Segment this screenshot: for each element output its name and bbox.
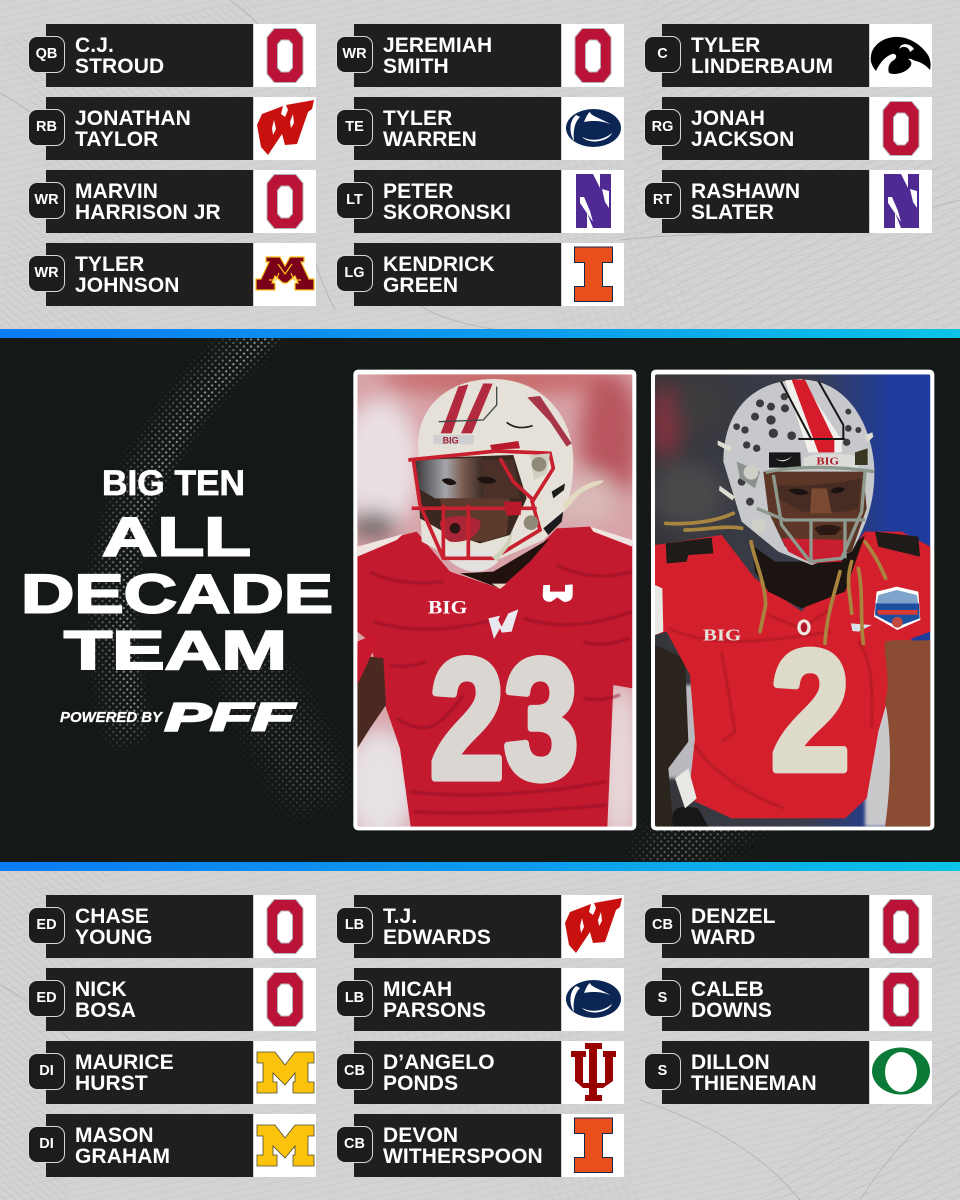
photo: Ohio State defensive end number 2: BIG (703, 625, 741, 644)
roster row: CB Devon Witherspoon, Illinois: CB (344, 1136, 365, 1152)
roster row: LG Kendrick Green, Illinois: LG (344, 265, 365, 281)
roster row: QB C.J. Stroud, Ohio State: QB (36, 46, 57, 62)
roster row: DI Mason Graham, Michigan: GRAHAM (75, 1145, 170, 1168)
roster row: RG Jonah Jackson, Ohio State: RG (652, 119, 673, 135)
photo: Wisconsin running back number 23: BIG (443, 435, 459, 445)
photo: Ohio State defensive end number 2 (648, 370, 934, 830)
roster row: LT Peter Skoronski, Northwestern: PETER (383, 180, 454, 203)
roster row: S Dillon Thieneman, Oregon: DILLON (691, 1051, 770, 1074)
roster row: LB Micah Parsons, Penn State: MICAH (383, 978, 452, 1001)
roster row: DI Maurice Hurst, Michigan: MAURICE (75, 1051, 174, 1074)
roster row: WR Tyler Johnson, Minnesota: WR (34, 265, 59, 281)
roster row: LG Kendrick Green, Illinois (336, 243, 624, 306)
roster row: CB Denzel Ward, Ohio State: WARD (691, 926, 756, 949)
roster row: ED Chase Young, Ohio State: CHASE (75, 905, 149, 928)
roster row: S Caleb Downs, Ohio State (644, 968, 932, 1031)
heading: Team: TEAM (64, 619, 287, 681)
roster row: QB C.J. Stroud, Ohio State: C.J. (75, 34, 114, 57)
photo: Wisconsin running back number 23 (340, 362, 640, 845)
roster row: RB Jonathan Taylor, Wisconsin: RB (36, 119, 57, 135)
roster row: ED Chase Young, Ohio State: ED (36, 917, 57, 933)
roster row: ED Nick Bosa, Ohio State: NICK (75, 978, 127, 1001)
roster row: CB Denzel Ward, Ohio State: CB (652, 917, 673, 933)
roster row: RT Rashawn Slater, Northwestern: RT (653, 192, 672, 208)
roster row: DI Mason Graham, Michigan (28, 1114, 316, 1177)
roster row: WR Marvin Harrison Jr, Ohio State: HARRISON JR (75, 201, 221, 224)
roster row: RB Jonathan Taylor, Wisconsin (28, 97, 316, 160)
roster row: RT Rashawn Slater, Northwestern (644, 170, 932, 233)
roster row: C Tyler Linderbaum, Iowa: LINDERBAUM (691, 55, 833, 78)
roster row: RB Jonathan Taylor, Wisconsin: TAYLOR (75, 128, 158, 151)
roster row: CB Devon Witherspoon, Illinois (336, 1114, 624, 1177)
heading: Big Ten: BIG TEN (102, 464, 245, 503)
roster row: WR Marvin Harrison Jr, Ohio State: MARVIN (75, 180, 158, 203)
roster row: LB T.J. Edwards, Wisconsin: EDWARDS (383, 926, 491, 949)
roster row: C Tyler Linderbaum, Iowa (644, 24, 932, 87)
roster row: LB Micah Parsons, Penn State: PARSONS (383, 999, 486, 1022)
roster row: RG Jonah Jackson, Ohio State (644, 97, 932, 160)
powered by label: POWERED BY (60, 709, 164, 726)
roster row: WR Jeremiah Smith, Ohio State (336, 24, 624, 87)
roster row: WR Marvin Harrison Jr, Ohio State (28, 170, 316, 233)
roster row: LB Micah Parsons, Penn State: LB (345, 990, 364, 1006)
roster row: QB C.J. Stroud, Ohio State: STROUD (75, 55, 164, 78)
roster row: ED Nick Bosa, Ohio State (28, 968, 316, 1031)
roster row: ED Chase Young, Ohio State (28, 895, 316, 958)
photo: Wisconsin running back number 23: BIG (428, 598, 467, 619)
bowl game patch (874, 587, 920, 630)
roster row: TE Tyler Warren, Penn State (336, 97, 624, 160)
PFF logo: PFF (165, 696, 296, 740)
center band: title and player photos (0, 329, 960, 871)
roster row: LB Micah Parsons, Penn State (336, 968, 624, 1031)
roster row: CB D'Angelo Ponds, Indiana (336, 1041, 624, 1104)
roster row: RT Rashawn Slater, Northwestern: RASHAWN (691, 180, 800, 203)
jersey number 2: 2 (771, 616, 850, 806)
roster row: WR Jeremiah Smith, Ohio State: WR (342, 46, 367, 62)
roster row: CB D'Angelo Ponds, Indiana: PONDS (383, 1072, 458, 1095)
roster row: S Caleb Downs, Ohio State: DOWNS (691, 999, 772, 1022)
roster row: QB C.J. Stroud, Ohio State (28, 24, 316, 87)
roster row: S Caleb Downs, Ohio State: S (658, 990, 667, 1006)
roster row: DI Mason Graham, Michigan: DI (39, 1136, 54, 1152)
roster row: WR Tyler Johnson, Minnesota: JOHNSON (75, 274, 180, 297)
roster row: ED Nick Bosa, Ohio State: BOSA (75, 999, 136, 1022)
roster row: TE Tyler Warren, Penn State: TE (345, 119, 364, 135)
roster row: RG Jonah Jackson, Ohio State: JONAH (691, 107, 765, 130)
bottom roster panel: defense (28, 895, 932, 1177)
roster row: S Dillon Thieneman, Oregon (644, 1041, 932, 1104)
roster row: LB T.J. Edwards, Wisconsin: T.J. (383, 905, 417, 928)
roster row: WR Marvin Harrison Jr, Ohio State: WR (34, 192, 59, 208)
roster row: DI Maurice Hurst, Michigan: DI (39, 1063, 54, 1079)
roster row: WR Tyler Johnson, Minnesota (28, 243, 316, 306)
roster row: LT Peter Skoronski, Northwestern: SKORONSKI (383, 201, 511, 224)
roster row: DI Maurice Hurst, Michigan (28, 1041, 316, 1104)
roster row: S Dillon Thieneman, Oregon: THIENEMAN (691, 1072, 817, 1095)
roster row: CB Devon Witherspoon, Illinois: DEVON (383, 1124, 458, 1147)
roster row: LT Peter Skoronski, Northwestern (336, 170, 624, 233)
heading: Decade: DECADE (21, 562, 333, 624)
photo: Ohio State defensive end number 2: BIG (816, 456, 839, 467)
roster row: LG Kendrick Green, Illinois: KENDRICK (383, 253, 495, 276)
roster row: DI Maurice Hurst, Michigan: HURST (75, 1072, 148, 1095)
roster row: S Caleb Downs, Ohio State: CALEB (691, 978, 764, 1001)
roster row: CB Denzel Ward, Ohio State: DENZEL (691, 905, 776, 928)
roster row: RG Jonah Jackson, Ohio State: JACKSON (691, 128, 794, 151)
roster row: WR Tyler Johnson, Minnesota: TYLER (75, 253, 144, 276)
roster row: C Tyler Linderbaum, Iowa: C (657, 46, 668, 62)
roster row: LG Kendrick Green, Illinois: GREEN (383, 274, 458, 297)
roster row: RT Rashawn Slater, Northwestern: SLATER (691, 201, 774, 224)
roster row: ED Chase Young, Ohio State: YOUNG (75, 926, 153, 949)
roster row: ED Nick Bosa, Ohio State: ED (36, 990, 57, 1006)
roster row: CB Denzel Ward, Ohio State (644, 895, 932, 958)
roster row: TE Tyler Warren, Penn State: TYLER (383, 107, 452, 130)
roster row: RB Jonathan Taylor, Wisconsin: JONATHAN (75, 107, 191, 130)
top roster panel: offense (28, 24, 932, 306)
title block (21, 464, 333, 740)
roster row: LB T.J. Edwards, Wisconsin: LB (345, 917, 364, 933)
roster row: DI Mason Graham, Michigan: MASON (75, 1124, 154, 1147)
roster row: CB D'Angelo Ponds, Indiana: D’ANGELO (383, 1051, 495, 1074)
roster row: CB Devon Witherspoon, Illinois: WITHERSPOON (383, 1145, 543, 1168)
roster row: LT Peter Skoronski, Northwestern: LT (346, 192, 363, 208)
roster row: WR Jeremiah Smith, Ohio State: SMITH (383, 55, 449, 78)
heading: All: ALL (102, 506, 251, 568)
roster row: C Tyler Linderbaum, Iowa: TYLER (691, 34, 760, 57)
roster row: S Dillon Thieneman, Oregon: S (658, 1063, 667, 1079)
roster row: TE Tyler Warren, Penn State: WARREN (383, 128, 477, 151)
roster row: LB T.J. Edwards, Wisconsin (336, 895, 624, 958)
jersey number 23: 23 (430, 625, 578, 815)
roster row: CB D'Angelo Ponds, Indiana: CB (344, 1063, 365, 1079)
roster row: WR Jeremiah Smith, Ohio State: JEREMIAH (383, 34, 492, 57)
